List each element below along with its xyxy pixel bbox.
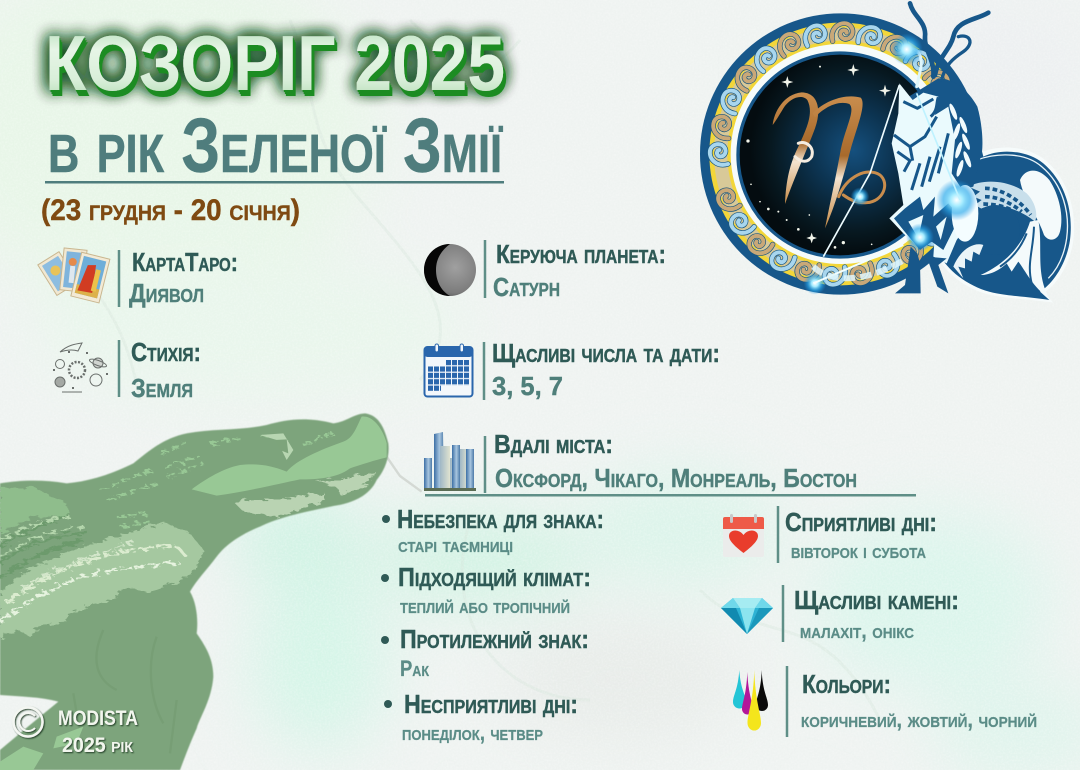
copyright icon (14, 708, 42, 736)
label: Стихія: (131, 337, 201, 367)
subtitle: в рік Зеленої Змії (48, 103, 504, 189)
capricorn glyph (773, 92, 885, 228)
section divider (425, 494, 916, 496)
label: Щасливі камені: (794, 585, 959, 615)
label: Щасливі числа та дати: (492, 338, 720, 368)
value: вівторок і субота (791, 538, 926, 563)
item: favourable days (723, 506, 937, 563)
illustration: green snake (0, 413, 422, 770)
icon: planet (424, 244, 476, 296)
watermark (14, 707, 138, 757)
lower teeth (953, 244, 983, 278)
goat rear disc (938, 127, 1074, 303)
fact: opposite sign (381, 624, 589, 681)
goat body (889, 83, 973, 263)
value: Диявол (129, 278, 204, 308)
label: КартаТаро: (132, 247, 238, 277)
goat legs (895, 247, 948, 293)
fact: climate (381, 562, 591, 618)
fact: climate: теплий або тропічний (400, 593, 570, 618)
list: sign facts (381, 504, 604, 745)
divider (483, 342, 485, 400)
icon: calendar (424, 344, 472, 396)
tail (981, 220, 1049, 298)
label: Вдалі міста: (494, 429, 613, 459)
snake body silhouette (0, 413, 389, 770)
fact: climate: Підходящий клімат: (398, 562, 591, 592)
divider (777, 506, 779, 563)
icon: cosmic doodle (53, 343, 108, 392)
value: Оксфорд, Чікаго, Монреаль, Бостон (495, 463, 857, 493)
fact: unfavourable days: Несприятливі дні: (404, 689, 578, 719)
icon: paint drops (733, 670, 768, 731)
divider (118, 340, 120, 397)
light flares (804, 33, 978, 295)
inner disc (970, 205, 1020, 255)
label: Керуюча планета: (496, 239, 666, 269)
value: Земля (131, 373, 193, 403)
snake tongue (387, 457, 422, 492)
snake belly (0, 522, 205, 638)
snake eye (260, 433, 293, 460)
divider (484, 240, 486, 298)
snake head highlight (192, 417, 387, 496)
fact: danger: Небезпека для знака: (397, 504, 604, 534)
watermark name: MODISTA (58, 707, 138, 730)
divider (782, 585, 784, 642)
value: коричневий, жовтий, чорний (801, 707, 1037, 732)
icon: diamond (721, 598, 773, 634)
value: 3, 5, 7 (492, 371, 563, 401)
goat neck feathers (948, 103, 973, 177)
label: Сприятливі дні: (785, 507, 937, 537)
snake lower coil (0, 727, 83, 770)
goat neck backing (903, 78, 982, 200)
snake neck scales (100, 433, 377, 527)
date range: (23 грудня - 20 січня) (41, 194, 300, 227)
item: lucky stones (721, 585, 959, 643)
scale field (968, 182, 1036, 222)
item: colours (733, 666, 1037, 737)
value: Сатурн (493, 272, 560, 302)
fact: danger (382, 504, 604, 557)
icon: heart calendar (723, 514, 764, 557)
divider (786, 666, 788, 737)
snake back pattern (0, 487, 205, 638)
subtitle underline (45, 181, 504, 184)
fact: danger: старі таємниці (398, 532, 513, 557)
ring lower glow ornament (813, 258, 907, 278)
value: малахіт, онікс (800, 618, 914, 643)
fact: opposite sign: Рак (400, 656, 430, 681)
light streak (823, 85, 899, 257)
title: КОЗОРІГ 2025 (45, 19, 505, 107)
item: element (53, 337, 201, 403)
label: Кольори: (802, 669, 891, 699)
white crescent (1020, 171, 1061, 240)
zodiac ring (700, 13, 981, 295)
item: tarot card (38, 247, 238, 308)
divider (118, 250, 120, 307)
fact: unfavourable days: понеділок, четвер (402, 720, 543, 745)
item: lucky numbers (424, 338, 720, 401)
icon: skyscrapers (424, 432, 476, 491)
goat horns (907, 3, 988, 87)
starry disc (738, 53, 942, 257)
grass shadows (73, 630, 177, 753)
icon: tarot cards (38, 248, 110, 303)
item: distant cities (424, 429, 857, 493)
snake jaw (233, 472, 377, 517)
fact: opposite sign: Протилежний знак: (400, 624, 589, 654)
fact: unfavourable days (384, 689, 578, 745)
watermark year: 2025 рік (62, 734, 134, 757)
divider (484, 436, 486, 493)
item: ruling planet (424, 239, 666, 302)
illustration: capricorn emblem (700, 3, 1074, 303)
